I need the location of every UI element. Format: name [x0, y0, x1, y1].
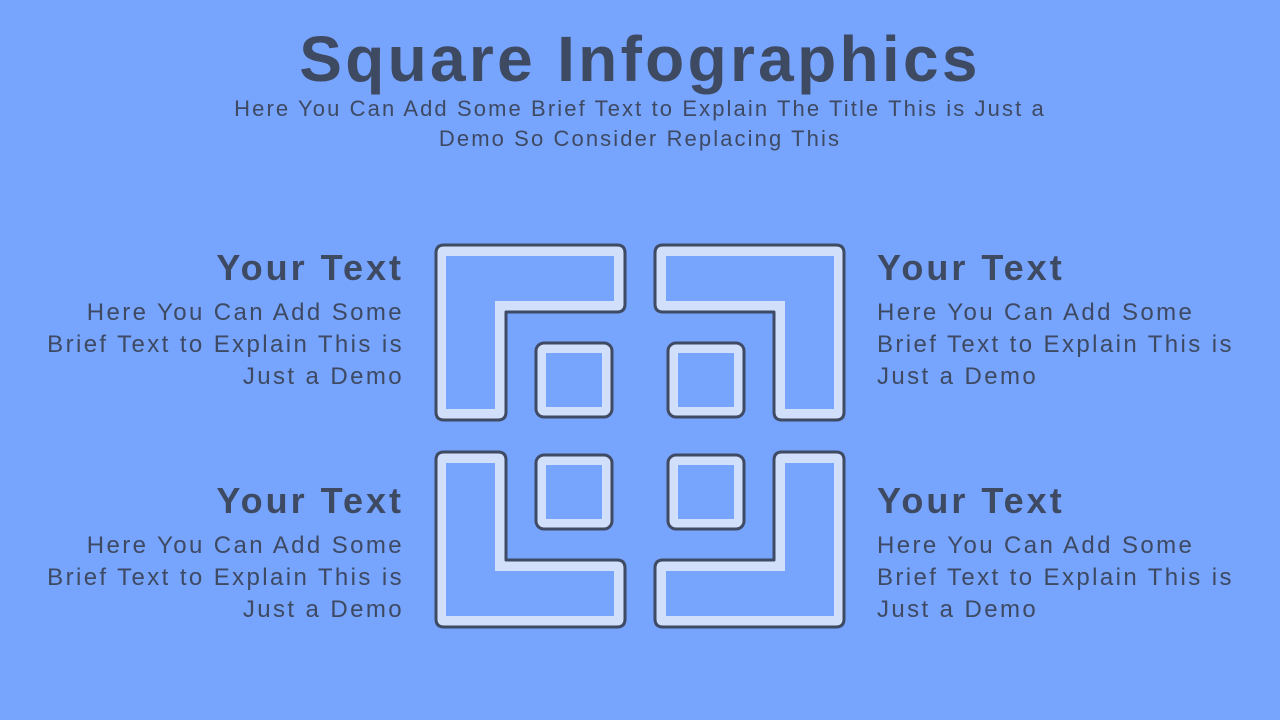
- text block: bottom left: [47, 480, 404, 623]
- text block: top right: [877, 247, 1234, 390]
- text block: top left: [47, 247, 404, 390]
- text block: top right: Here You Can Add Some: [877, 299, 1194, 326]
- text block: top right: Your Text: [877, 247, 1065, 288]
- text block: bottom left: Your Text: [216, 480, 404, 521]
- text block: top right: Brief Text to Explain This is: [877, 331, 1234, 358]
- text block: top left: Just a Demo: [243, 363, 404, 390]
- title: Square Infographics: [299, 23, 981, 95]
- text block: bottom right: [877, 480, 1234, 623]
- text block: top left: Here You Can Add Some: [87, 299, 404, 326]
- text block: bottom left: Brief Text to Explain This is: [47, 564, 404, 591]
- subtitle: Here You Can Add Some Brief Text to Explain The Title This is Just a: [234, 96, 1046, 121]
- text block: bottom left: Here You Can Add Some: [87, 532, 404, 559]
- text block: top left: Your Text: [216, 247, 404, 288]
- text block: bottom right: Just a Demo: [877, 596, 1038, 623]
- text block: bottom right: Brief Text to Explain This is: [877, 564, 1234, 591]
- subtitle: Demo So Consider Replacing This: [439, 126, 841, 151]
- piece: bottom left: [436, 452, 625, 627]
- text block: bottom left: Just a Demo: [243, 596, 404, 623]
- subtitle: [234, 96, 1046, 151]
- piece: bottom right: [655, 452, 844, 627]
- text block: top right: Just a Demo: [877, 363, 1038, 390]
- piece: top right: [655, 245, 844, 420]
- text block: bottom right: Here You Can Add Some: [877, 532, 1194, 559]
- text block: bottom right: Your Text: [877, 480, 1065, 521]
- piece: top left: [436, 245, 625, 420]
- text block: top left: Brief Text to Explain This is: [47, 331, 404, 358]
